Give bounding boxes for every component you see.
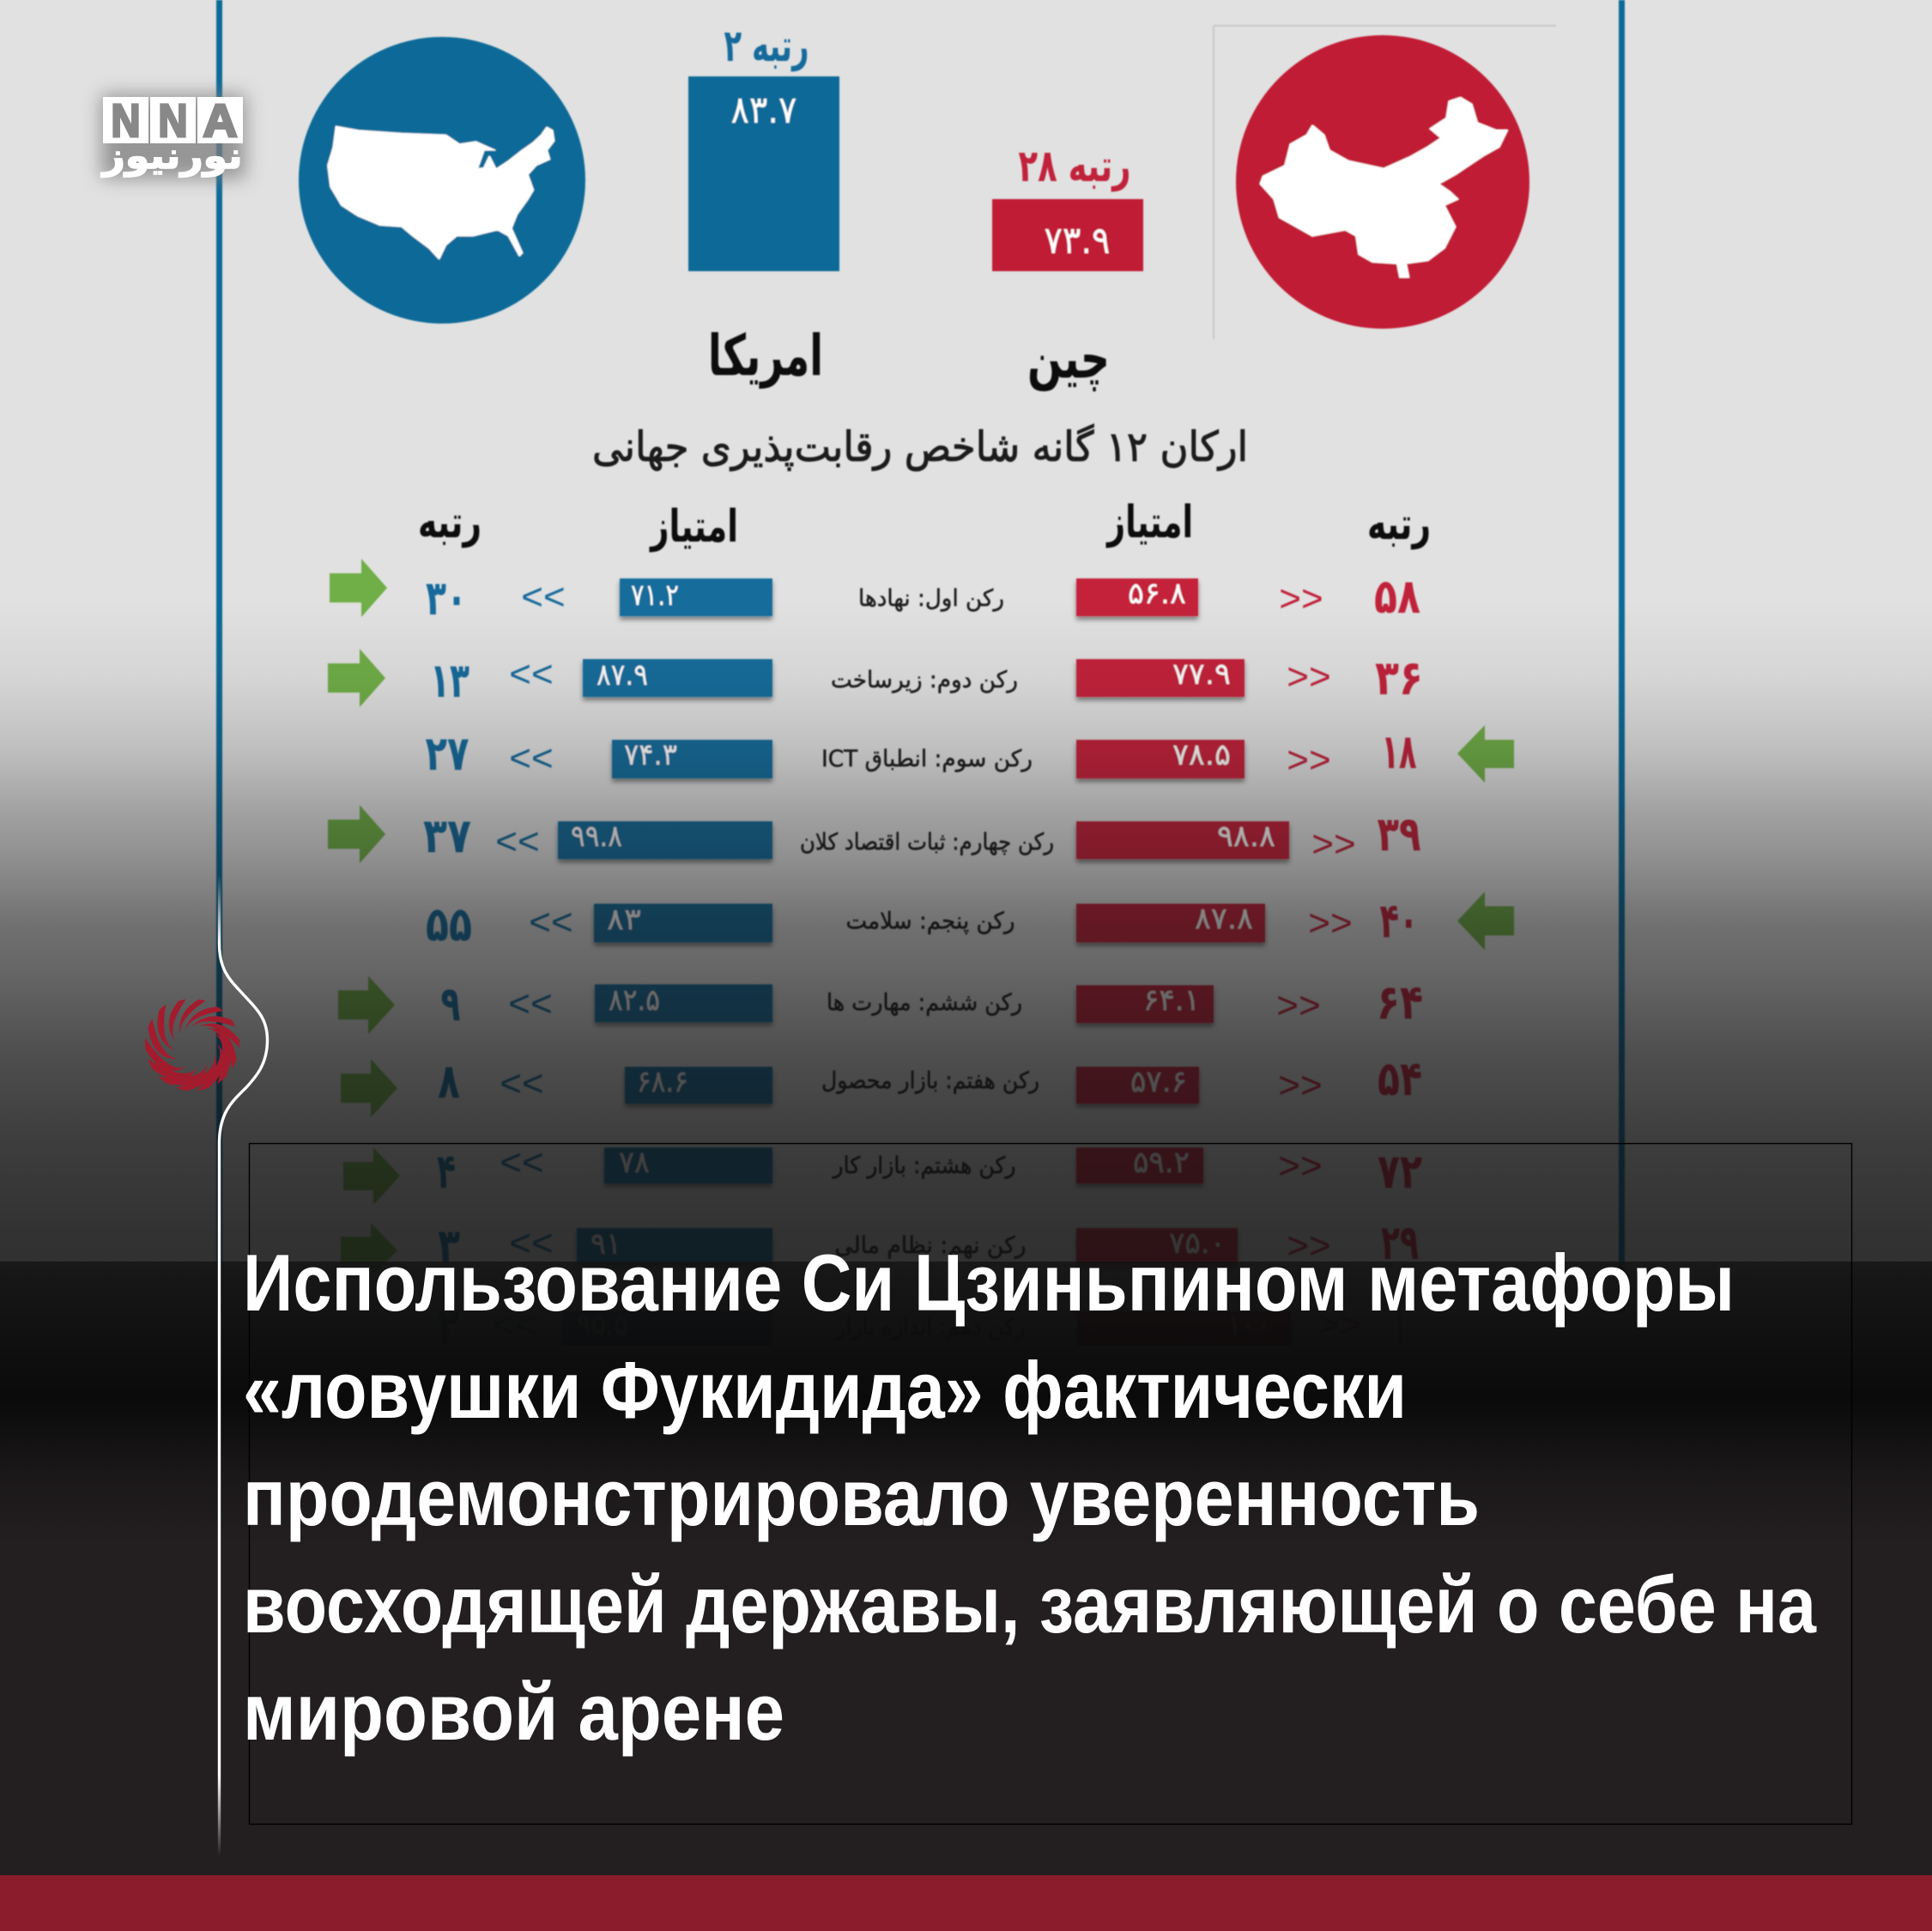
row 9: رکن نهم: نظام مالی [834,1232,1027,1259]
row 6: << [508,983,553,1025]
row 5 [426,892,1514,953]
row 7: ۶۸.۶ [637,1065,688,1099]
infographic: US and China competitiveness comparison [216,0,1625,1355]
thin text frame [249,1143,1852,1825]
row 5: ۵۵ [426,897,472,953]
row 1: << [521,576,566,618]
row 1: رکن اول: نهادها [858,585,1004,612]
row 2: ۸۷.۹ [597,658,648,693]
headline: продемонстрировало уверенность [243,1452,1480,1542]
headline: Использование Си Цзиньпином метафоры [243,1238,1735,1328]
icon: China map circle [1236,35,1529,329]
row 7: ۵۴ [1378,1051,1422,1107]
row 1: ۷۱.۲ [631,578,679,613]
row 8 [343,1141,1422,1205]
table column headers [418,497,1431,553]
row 4: << [495,820,540,863]
row 3 [426,724,1514,783]
left border line [216,0,222,1313]
icon: US map circle [299,37,585,324]
row 3: ۷۴.۳ [624,738,677,772]
row 2 [328,649,1423,709]
row 6: ۶۴ [1377,975,1423,1031]
row 10: << [493,1304,537,1346]
row 3: رکن سوم: انطباق ICT [821,746,1033,772]
China rank bar [992,141,1143,271]
row 4: ۳۷ [423,808,471,864]
row 5: ۸۳ [607,903,641,937]
row 9: ۳ [438,1219,460,1274]
icon: NNA logo: نورنیوز [100,135,242,178]
row 1: >> [1279,578,1323,620]
row 2: ۷۷.۹ [1172,657,1231,692]
row 9 [341,1215,1419,1278]
infographic: US and China competitiveness comparison: ۱ [1395,1299,1405,1355]
row 6: ۸۲.۵ [609,984,660,1018]
row 6: ۹ [441,977,460,1032]
row 4: ۳۹ [1377,807,1421,863]
headline: мировой арене [243,1667,784,1757]
icon: red spiral emblem [139,996,245,1099]
row 4 [328,805,1421,865]
country name: USA: امریکا [708,323,823,389]
row 7: << [500,1062,544,1105]
table column headers: امتیاز [1105,497,1193,548]
row 5: رکن پنجم: سلامت [846,908,1014,935]
row 4: ۹۹.۸ [571,820,622,854]
row 4: ۹۸.۸ [1217,820,1275,854]
row 9: >> [1287,1225,1331,1267]
icon: NNA logo: N [112,95,141,147]
row 6: رکن ششم: مهارت ها [827,990,1022,1016]
table column headers: رتبه [1367,499,1431,550]
dark gradient overlay [0,601,1932,1262]
row 3: ۷۸.۵ [1172,738,1231,772]
row 8: << [500,1141,544,1183]
row 3: ۲۷ [426,726,469,782]
white curved timeline line [220,875,268,1856]
row 9: << [509,1222,554,1264]
bottom dark panel [0,1262,1932,1931]
row 2: رکن دوم: زیرساخت [831,667,1018,693]
US rank bar: ۸۳.۷ [731,88,796,132]
row 10: >> [1317,1304,1361,1346]
China rank bar: ۷۳.۹ [1044,219,1111,263]
row 5: >> [1308,902,1353,944]
row 8: ۵۹.۲ [1133,1146,1190,1180]
row 9: ۷۵.۰ [1169,1226,1226,1261]
row 10: ۱۰۰ [1227,1308,1270,1342]
row 10 [438,1299,1405,1355]
row 7: ۵۷.۶ [1130,1065,1187,1099]
row 5: << [529,901,573,943]
row 1: ۵۶.۸ [1128,577,1186,611]
US rank bar [688,21,839,271]
row 7: رکن هفتم: بازار محصول [821,1068,1039,1094]
row 3: >> [1287,739,1331,781]
row 4: >> [1311,823,1356,865]
icon: NNA logo: N [158,95,187,147]
table column headers: رتبه [418,497,481,548]
headline: «ловушки Фукидида» фактически [243,1345,1407,1435]
row 6: >> [1276,984,1321,1026]
row 6: ۶۴.۱ [1143,984,1200,1018]
frame around China circle [1214,26,1556,339]
bottom red band [0,1875,1932,1931]
US rank bar: رتبه ۲ [724,21,809,72]
row 8: رکن هشتم: بازار کار [832,1153,1016,1179]
row 7: ۸ [438,1054,460,1110]
row 1: ۳۰ [426,571,467,627]
row 7: >> [1278,1064,1323,1106]
icon: NNA logo: A [203,95,237,147]
row 3: ۱۸ [1382,724,1416,780]
table title: ارکان ۱۲ گانه شاخص رقابت‌پذیری جهانی [592,423,1248,471]
row 7 [341,1051,1422,1117]
row 2: << [509,653,554,695]
row 4: رکن چهارم: ثبات اقتصاد کلان [800,829,1054,856]
table column headers: امتیاز [649,501,738,553]
row 8: ۷۲ [1378,1144,1422,1200]
row 5: ۸۷.۸ [1195,902,1253,936]
row 1 [330,559,1420,627]
row 8: ۴ [437,1144,456,1200]
row 1: ۵۸ [1374,569,1420,625]
row 9: ۹۱ [591,1227,621,1262]
row 2: >> [1287,656,1331,698]
country name: China: چین [1027,325,1110,391]
China rank bar: رتبه ۲۸ [1018,141,1131,192]
row 10: ۲ [438,1299,460,1355]
row 9: ۲۹ [1381,1215,1419,1271]
row 2: ۱۳ [430,653,469,709]
row 3: << [509,737,554,779]
row 5: ۴۰ [1380,893,1418,949]
row 6 [338,975,1423,1034]
row 10: ۹۵.۵ [577,1308,628,1342]
row 8: ۷۸ [619,1146,650,1180]
icon: NNA logo [100,94,245,179]
right border line [1619,0,1625,1313]
row 2: ۳۶ [1375,651,1423,706]
row 10: رکن دهم: اندازه بازار [834,1314,1025,1341]
row 8: >> [1278,1145,1323,1187]
headline [243,1238,1817,1757]
